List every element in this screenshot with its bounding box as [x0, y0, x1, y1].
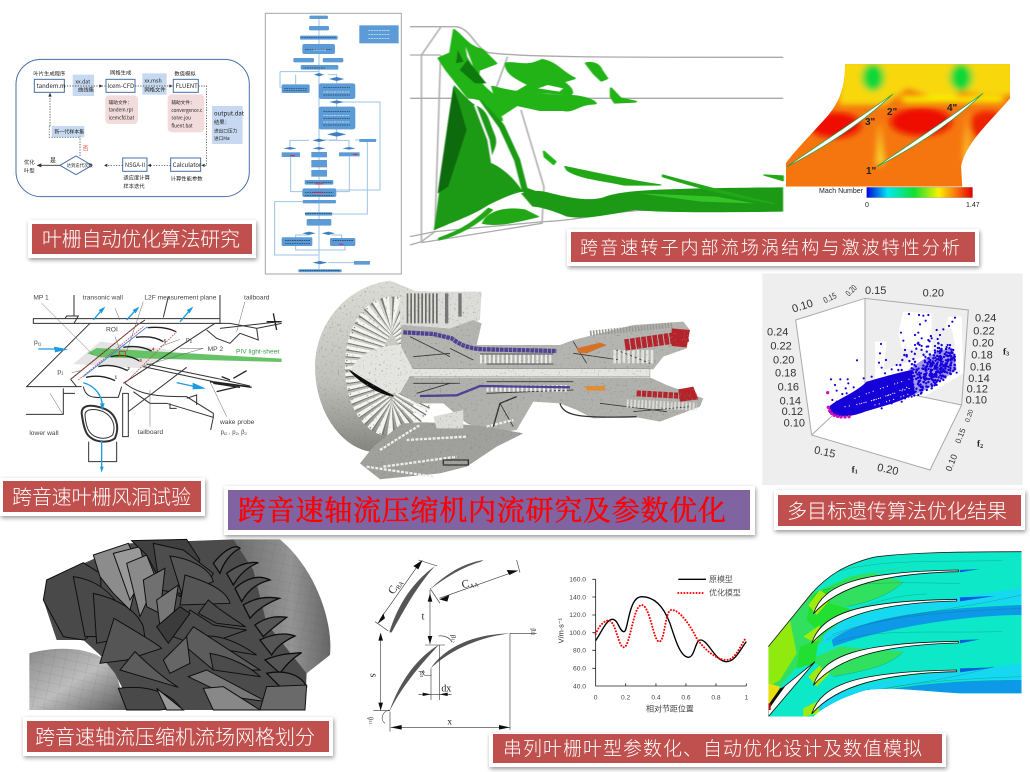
wind tunnel text [29, 294, 279, 437]
passage outline [410, 27, 783, 245]
flowchart text: icemcfd.bat [109, 114, 134, 121]
z axis labels: 0.10 [944, 453, 959, 473]
flowchart text: xx.dat [75, 77, 90, 85]
right band [458, 70, 544, 197]
z axis labels: 0.20 [923, 288, 944, 300]
right axis labels: 0.20 [972, 338, 994, 350]
label: GA results [774, 490, 1025, 530]
chart axes [592, 579, 746, 686]
z axis labels: 0.15 [953, 426, 968, 445]
axis titles: f [977, 440, 980, 450]
panel: detailed algorithm flowchart [265, 13, 401, 274]
contour lines [815, 561, 1022, 710]
line chart: velocity vs relative pitch: 优化模型 [709, 588, 741, 599]
rounded frame [16, 59, 249, 197]
geometry symbols: x [447, 718, 452, 728]
flowchart text: 叶片生成程序 [33, 69, 66, 77]
label: tandem blade design: 串列叶栅叶型参数化、自动优化设计及数值模拟 [503, 734, 922, 761]
z axis labels: 0.15 [822, 290, 839, 305]
right hub [200, 539, 330, 673]
panel: Mach number contour [786, 60, 1015, 198]
Mach labels: 3" [865, 117, 876, 128]
wind tunnel text: tailboard [138, 429, 163, 436]
second-stage blades [157, 600, 307, 710]
right axis labels: 0.10 [966, 394, 987, 406]
geometry symbols: BA [396, 580, 406, 591]
y tick labels: 80.0 [573, 648, 586, 655]
label: cascade optimisation [28, 220, 256, 258]
colour bar [867, 187, 973, 198]
flowchart text: 否 [83, 144, 89, 153]
right axis labels: 0.16 [970, 362, 991, 374]
blade row backing [43, 539, 307, 710]
x tick labels [594, 694, 748, 701]
right axis labels: 0.22 [973, 325, 995, 337]
connectors [275, 17, 380, 269]
x tick labels: 0.6 [681, 694, 691, 701]
wind tunnel text: 2 [245, 431, 248, 436]
label: vortex and shock [567, 229, 979, 266]
hub vortex stream [521, 187, 783, 218]
flowchart text: 新一代样本集 [54, 129, 84, 136]
geometry symbols: β 22 [530, 628, 536, 635]
z axis labels: 0.16 [778, 382, 799, 394]
z axis labels: 0.18 [775, 368, 796, 380]
blade numbers [115, 338, 167, 379]
z axis labels [767, 283, 996, 478]
main vortex sheet [434, 85, 523, 231]
y tick labels: 100.0 [569, 630, 586, 637]
top vortex cluster [439, 30, 636, 164]
flowchart text: 优化 [24, 158, 35, 166]
z axis labels: 0.20 [843, 283, 859, 298]
z axis labels: 0.20 [964, 408, 975, 423]
tiny box text [284, 38, 353, 271]
wake probe and traverse [210, 313, 282, 392]
right axis labels: 0.24 [975, 313, 996, 325]
decision diamonds [283, 73, 356, 264]
y tick labels: 160.0 [569, 577, 586, 584]
flowchart text: xx.msh [144, 76, 162, 84]
geometry symbols: β 21 [418, 671, 424, 678]
white walls [796, 298, 962, 470]
flowchart text: tandem.m [37, 81, 66, 90]
blue bands [832, 605, 1022, 647]
wind tunnel text: L2F measurement plane [144, 294, 217, 301]
axis titles: 1 [855, 470, 858, 476]
blade numbers: 4 [152, 347, 155, 352]
label: wind tunnel test: 跨音速叶栅风洞试验 [12, 481, 191, 510]
axis titles: 3 [1006, 352, 1009, 358]
optimised model curve [596, 605, 745, 660]
wind tunnel text: PIV light-sheet [236, 348, 279, 355]
first-stage blades [43, 539, 230, 710]
label: vortex and shock: 跨音速转子内部流场涡结构与激波特性分析 [580, 234, 960, 260]
flowchart text: 达到迭代次数 [67, 162, 93, 169]
dimension lines [373, 560, 537, 732]
geometry symbols: s [368, 673, 379, 677]
geometry symbols: β 11 [366, 716, 375, 725]
wind tunnel text: wake probe [219, 419, 255, 426]
blue file labels [52, 73, 243, 144]
y tick labels: 40.0 [573, 683, 586, 690]
wind tunnel text: p [186, 337, 190, 344]
flowchart text: 辅助文件： [109, 99, 132, 106]
panel: cascade velocity contours [768, 552, 1022, 718]
plot box [796, 298, 968, 470]
right axis labels: 0.12 [967, 384, 988, 396]
wind tunnel text: 2 [190, 339, 193, 344]
panel: multi-objective GA scatter plot [762, 273, 1023, 485]
wind tunnel text: 2 [236, 431, 239, 436]
label: mesh generation [23, 717, 333, 756]
fan case disc [315, 281, 413, 452]
blade numbers: 2 [127, 366, 130, 371]
axis titles: 相对节距位置 [646, 704, 694, 715]
line chart: velocity vs relative pitch: 原模型 [709, 574, 733, 585]
y tick labels: 120.0 [569, 612, 586, 619]
line chart: velocity vs relative pitch: V/m·s⁻¹ [556, 617, 565, 643]
cloud haze [908, 348, 957, 396]
combustor [577, 343, 607, 353]
axis titles [852, 347, 1009, 476]
wind tunnel text: t1 [38, 341, 42, 346]
dark sheet [438, 87, 467, 193]
z axis labels: 0.22 [770, 340, 792, 352]
cascade outline [768, 552, 1022, 647]
Mach labels: 0 [865, 202, 869, 209]
Mach labels [819, 103, 980, 209]
z axis labels: 0.12 [782, 406, 803, 418]
panel: compressor mesh [29, 539, 330, 710]
arrowheads [37, 84, 205, 167]
flowchart text: fluent.bat [171, 122, 193, 129]
right axis labels [966, 313, 996, 406]
lower core [400, 377, 703, 433]
nose cone [350, 345, 413, 394]
z axis labels: 0.10 [791, 297, 815, 316]
panel: transonic rotor vortex iso-surface [410, 27, 783, 245]
wind tunnel text: ROI [106, 327, 118, 334]
shaft [397, 369, 650, 377]
label: mesh generation: 跨音速轴流压缩机流场网格划分 [35, 721, 315, 750]
blades [787, 93, 983, 167]
flowchart text: 是 [50, 156, 56, 165]
wind tunnel text: t2 [224, 431, 228, 436]
label: wind tunnel test [0, 478, 205, 516]
flowchart text: output.dat [214, 108, 245, 117]
z axis labels: 0.20 [876, 462, 899, 478]
panel: tandem blade parameterisation [366, 560, 537, 732]
core detail [410, 337, 690, 427]
blade profiles [389, 560, 510, 712]
lower blobs [439, 167, 783, 240]
wind tunnel text: p [221, 430, 224, 436]
x tick labels: 1 [744, 694, 748, 701]
geometry symbols: t [422, 611, 425, 622]
upper core [400, 320, 690, 369]
contour field [786, 60, 1015, 187]
leader lines [42, 302, 245, 427]
flowchart text: 结果： [214, 118, 230, 126]
flowchart text: 网格生成 [110, 68, 132, 76]
wind tunnel text: p [34, 339, 38, 346]
blade numbers: 5 [164, 338, 167, 343]
z axis labels: 0.10 [784, 418, 805, 430]
x tick labels: 0.4 [651, 694, 661, 701]
wind tunnel text: tailboard [244, 294, 270, 301]
flowchart text: 数值模拟 [174, 69, 196, 77]
contour field [768, 552, 1022, 718]
x tick labels: 0.8 [711, 694, 721, 701]
axis titles: f [1003, 347, 1006, 357]
plot background [762, 273, 1023, 485]
scattered points [831, 314, 957, 408]
purple compressor bands [403, 332, 570, 396]
axis titles: f [852, 465, 855, 475]
process boxes [34, 79, 201, 175]
main title: 跨音速轴流压缩机内流研究及参数优化 [238, 489, 726, 529]
flowchart text: 网格文件 [144, 86, 166, 94]
tunnel structure [26, 295, 282, 462]
cascade walls and blades [72, 323, 143, 380]
geometry symbols: β 12 [450, 635, 457, 643]
geometry symbols: C [386, 584, 400, 597]
flowchart text: 曲线集 [78, 86, 95, 94]
blade numbers: 1 [115, 374, 118, 379]
geometry symbols: AA [469, 582, 480, 590]
label: cascade optimisation: 叶栅自动优化算法研究 [42, 223, 240, 252]
flowchart text: 计算性能参数 [171, 175, 203, 183]
measurement plane [73, 342, 177, 368]
wind tunnel text: MP 1 [33, 294, 49, 301]
flowchart text: 样本迭代 [123, 182, 145, 190]
fan blades [363, 315, 420, 418]
pink helper-file boxes [105, 94, 204, 132]
flowchart text [24, 68, 245, 190]
bottom axis labels: 0.15 [813, 445, 836, 461]
process boxes [282, 16, 399, 272]
Mach labels: 1" [866, 166, 877, 177]
blade numbers: 3 [139, 358, 142, 363]
white speckle in cloud [845, 378, 915, 407]
panel: blade cascade optimisation flowchart [16, 59, 249, 197]
red turbine bands [625, 336, 688, 345]
flowchart text: 适应度计算 [123, 173, 151, 181]
right axis labels: 0.18 [971, 350, 993, 362]
wind tunnel text: , β [238, 430, 245, 436]
x tick labels: 0.2 [621, 694, 631, 701]
flowchart text: Calculator [173, 160, 202, 169]
flow arrows [49, 86, 207, 165]
PIV light sheet [87, 348, 282, 362]
z axis labels: 0.14 [780, 395, 801, 407]
lower fan section and accessories [360, 422, 523, 479]
z axis labels: 0.24 [767, 327, 788, 339]
left hub [29, 649, 127, 710]
wind tunnel text: MP 2 [208, 346, 223, 353]
flowchart text: 叶型 [24, 167, 35, 175]
Mach labels: Mach Number [819, 188, 864, 195]
geometry symbols [366, 576, 536, 728]
panel: transonic cascade wind tunnel diagram [26, 294, 282, 473]
flowchart text: convergence.c [171, 108, 203, 114]
dense point cloud [829, 370, 915, 416]
panel: turbofan engine cross-section [315, 281, 703, 479]
flowchart text: tandem.rpl [109, 107, 134, 114]
original model curve [596, 597, 746, 662]
wind tunnel text: transonic wall [83, 294, 124, 301]
right axis labels: 0.14 [968, 373, 990, 385]
flowchart text: solve.jou [171, 114, 191, 121]
y tick labels [569, 577, 586, 690]
cloud dots [898, 333, 957, 398]
wind tunnel text: p [57, 368, 61, 375]
arrowheads [377, 560, 518, 730]
legend [678, 577, 706, 581]
pink front points [828, 393, 849, 417]
wind tunnel text: lower wall [29, 430, 59, 437]
flowchart frame [265, 13, 401, 274]
wind tunnel text: 1 [61, 371, 64, 376]
Mach labels: 2" [887, 107, 898, 118]
line chart: velocity vs relative pitch [556, 574, 748, 715]
axis titles: 2 [980, 444, 983, 450]
y tick labels: 140.0 [569, 594, 586, 601]
z axis labels: 0.20 [773, 354, 794, 366]
x tick labels: 0 [594, 694, 598, 701]
bypass duct [400, 290, 482, 328]
cyan wake bands [820, 588, 1022, 715]
flowchart text: NSGA-II [125, 160, 145, 169]
blade leading points [768, 687, 785, 705]
wind tunnel text: , p [227, 430, 236, 436]
stator vanes [213, 547, 307, 690]
Mach labels: 4" [947, 103, 958, 114]
blue flow arrows [38, 308, 195, 470]
flowchart text: FLUENT [176, 81, 198, 90]
geometry symbols: dx [441, 683, 451, 694]
label: GA results: 多目标遗传算法优化结果 [787, 495, 1007, 524]
flowchart text: Icem-CFD [107, 81, 134, 90]
blades [768, 570, 958, 717]
flowchart text: 进口Ma [214, 135, 230, 142]
geometry symbols: C [460, 578, 471, 591]
flowchart text: 辅助文件： [171, 99, 195, 106]
Mach labels: 1.47 [966, 202, 980, 209]
flowchart text: 进出口压力 [214, 128, 238, 135]
top axis labels: 0.15 [865, 285, 886, 297]
y tick labels: 60.0 [573, 666, 586, 673]
